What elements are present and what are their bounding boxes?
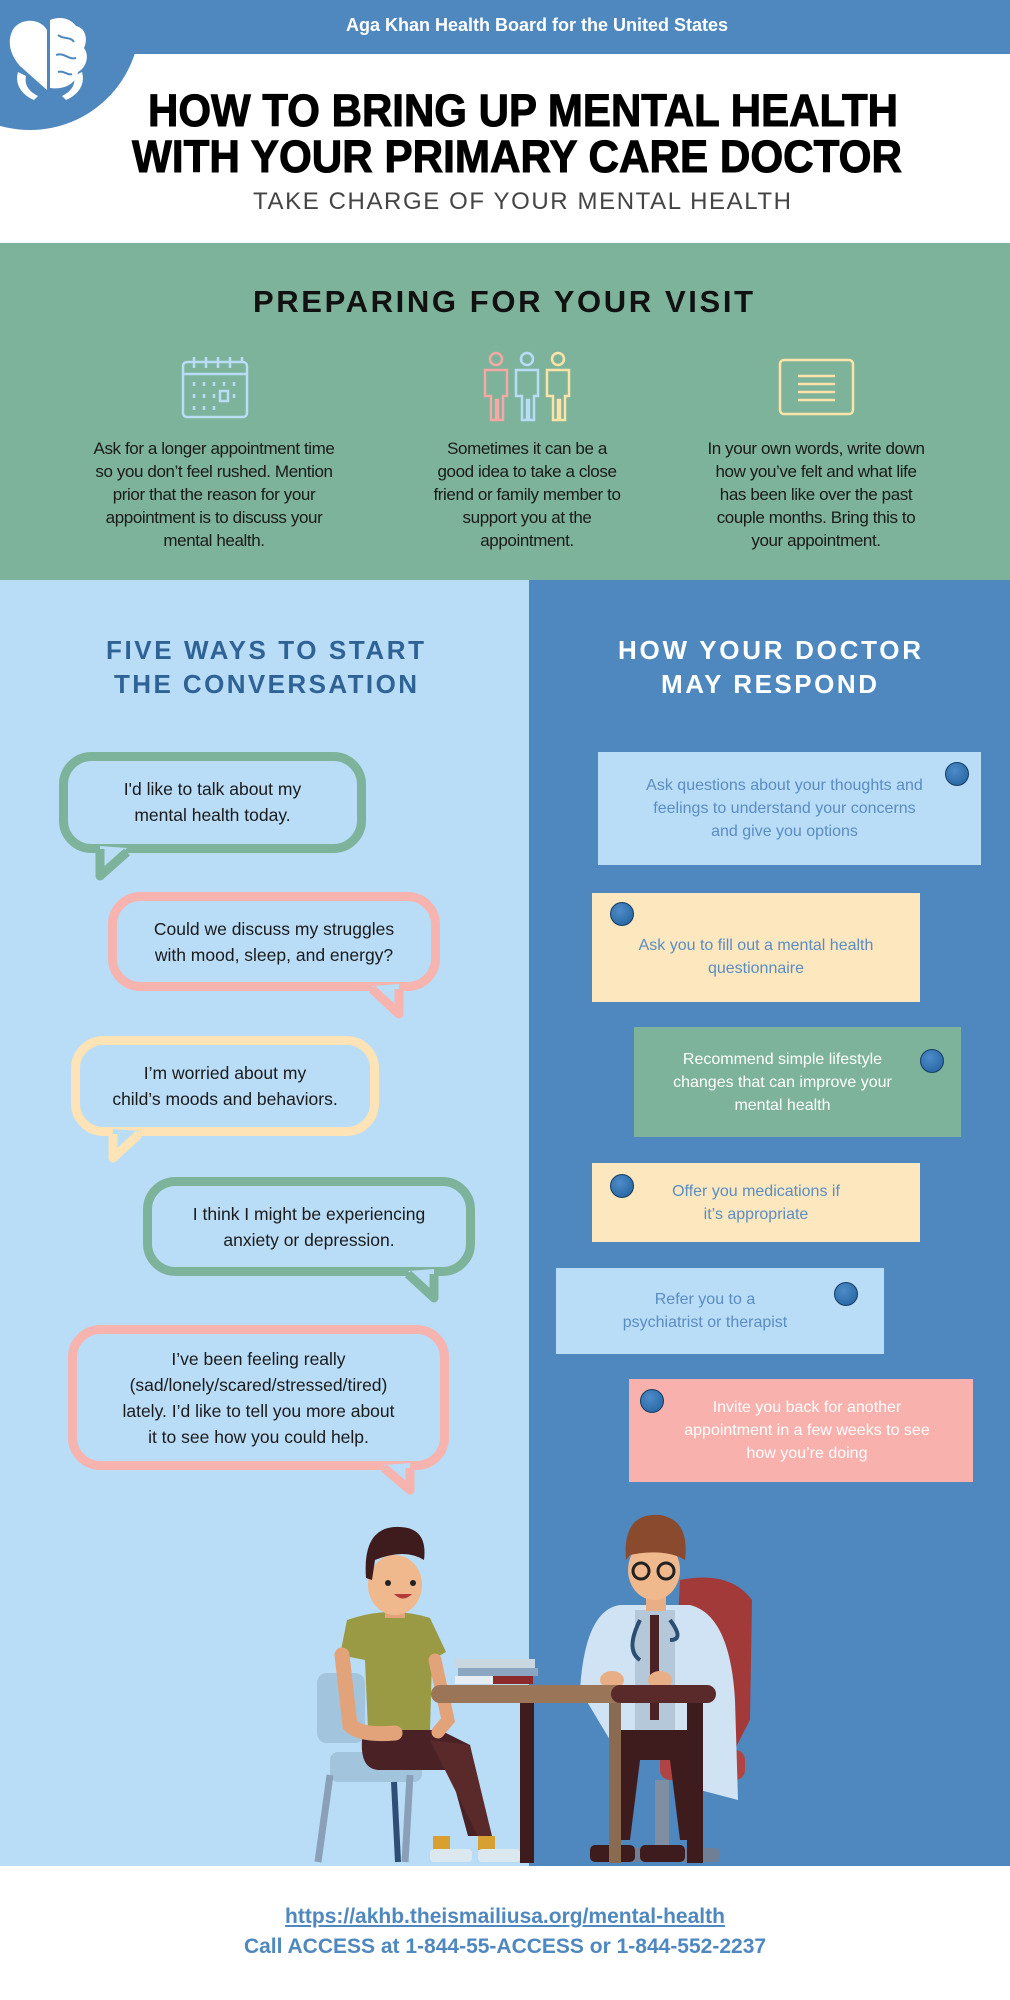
patient bbox=[340, 1527, 520, 1862]
logo badge bbox=[0, 18, 135, 130]
bubble 5 bbox=[72, 1330, 444, 1490]
response box 6: how you’re doing bbox=[746, 1445, 867, 1462]
bubble text 5 bbox=[122, 1348, 395, 1446]
text: tip 2 bbox=[433, 439, 621, 550]
text: tip 1: prior that the reason for your bbox=[113, 485, 315, 504]
text: tip 3: your appointment. bbox=[751, 531, 881, 550]
response box 2: Ask you to fill out a mental health bbox=[639, 936, 873, 954]
text: tip 3: how you’ve felt and what life bbox=[715, 462, 917, 481]
heading: doctor respond bbox=[618, 635, 921, 699]
icon: calendar bbox=[182, 357, 248, 418]
response box 1 bbox=[598, 752, 981, 865]
bubble text 2: Could we discuss my struggles bbox=[154, 918, 394, 938]
bubble text 5: (sad/lonely/scared/stressed/tired) bbox=[130, 1374, 387, 1394]
text: tip 3: In your own words, write down bbox=[707, 439, 925, 458]
response box 6: Invite you back for another bbox=[713, 1399, 901, 1416]
heading: doctor respond: HOW YOUR DOCTOR bbox=[618, 635, 921, 665]
text: tip 1: mental health. bbox=[163, 531, 265, 550]
response box 4: it’s appropriate bbox=[704, 1206, 808, 1222]
header bar bbox=[0, 0, 1010, 54]
response box 1: and give you options bbox=[711, 823, 858, 840]
bubble 2 bbox=[112, 896, 436, 1014]
header text: Aga Khan Health Board for the United States bbox=[346, 14, 728, 34]
bubble text 4: I think I might be experiencing bbox=[193, 1204, 425, 1224]
table bbox=[431, 1685, 716, 1863]
text: tip 1 bbox=[94, 439, 334, 550]
icon: dot 6 bbox=[640, 1389, 664, 1413]
bubble text 1 bbox=[124, 779, 302, 825]
bubble text 1: mental health today. bbox=[134, 805, 291, 825]
panel: left conversation background bbox=[0, 580, 529, 1866]
response box 2: questionnaire bbox=[708, 960, 804, 976]
bubble text 4: anxiety or depression. bbox=[223, 1230, 395, 1250]
icon: dot 2 bbox=[610, 902, 634, 926]
bubble text 5: it to see how you could help. bbox=[148, 1426, 369, 1446]
doctor bbox=[580, 1515, 738, 1862]
bubble text 4 bbox=[193, 1204, 425, 1250]
patient chair bbox=[317, 1673, 422, 1862]
panel: right responses background bbox=[529, 580, 1010, 1866]
bubble text 3: I’m worried about my bbox=[144, 1063, 306, 1083]
text: tip 3: couple months. Bring this to bbox=[717, 508, 915, 527]
bubble 1 bbox=[64, 756, 362, 876]
heading: five ways: FIVE WAYS TO START bbox=[106, 635, 424, 665]
heading: preparing: PREPARING FOR YOUR VISIT bbox=[253, 284, 753, 319]
footer bbox=[0, 1866, 1010, 2000]
response box 4 bbox=[592, 1163, 920, 1242]
text: tip 2: Sometimes it can be a bbox=[447, 439, 607, 458]
bubble text 5: I’ve been feeling really bbox=[171, 1348, 346, 1368]
response box 3: mental health bbox=[734, 1096, 831, 1114]
response box 4: Offer you medications if bbox=[672, 1182, 840, 1200]
icon: document bbox=[778, 358, 854, 416]
bubble text 5: lately. I’d like to tell you more about bbox=[122, 1400, 395, 1420]
bubble text 2 bbox=[154, 918, 394, 964]
bubble 3 bbox=[76, 1040, 374, 1158]
response box 1: feelings to understand your concerns bbox=[653, 800, 916, 817]
heading: five ways: THE CONVERSATION bbox=[114, 669, 417, 699]
title: TAKE CHARGE OF YOUR MENTAL HEALTH bbox=[253, 188, 791, 215]
icon: dot 3 bbox=[920, 1049, 944, 1073]
doctor chair bbox=[620, 1578, 752, 1862]
text: tip 3 bbox=[707, 439, 925, 550]
heading: doctor respond: MAY RESPOND bbox=[661, 669, 877, 699]
text: tip 2: good idea to take a close bbox=[437, 462, 617, 481]
response box 6 bbox=[629, 1379, 973, 1482]
books bbox=[455, 1659, 538, 1684]
title bbox=[132, 85, 902, 215]
footer link: https://akhb.theismailiusa.org/mental-health bbox=[285, 1905, 725, 1928]
icon: dot 4 bbox=[610, 1174, 634, 1198]
heading: five ways bbox=[106, 635, 424, 699]
text: tip 2: appointment. bbox=[480, 531, 574, 550]
footer phone: Call ACCESS at 1-844-55-ACCESS or 1-844-552-2237 bbox=[244, 1935, 766, 1958]
response box 5: psychiatrist or therapist bbox=[623, 1314, 787, 1331]
text: tip 1: appointment is to discuss your bbox=[106, 508, 322, 527]
icon: three people bbox=[484, 352, 570, 422]
bubble text 1: I'd like to talk about my bbox=[124, 779, 301, 799]
bubble 4 bbox=[148, 1182, 470, 1298]
bubble text 2: with mood, sleep, and energy? bbox=[155, 944, 393, 964]
response box 5: Refer you to a bbox=[655, 1291, 755, 1308]
response box 6: appointment in a few weeks to see bbox=[684, 1422, 930, 1439]
bubble text 3: child’s moods and behaviors. bbox=[112, 1089, 338, 1109]
bubble text 3 bbox=[112, 1063, 338, 1109]
title: WITH YOUR PRIMARY CARE DOCTOR bbox=[132, 131, 902, 182]
text: tip 2: friend or family member to bbox=[433, 485, 621, 504]
panel: preparing for your visit bbox=[0, 243, 1010, 580]
icon: dot 5 bbox=[834, 1282, 858, 1306]
response box 1: Ask questions about your thoughts and bbox=[646, 777, 923, 794]
icon: dot 1 bbox=[945, 762, 969, 786]
response box 3: Recommend simple lifestyle bbox=[683, 1050, 882, 1068]
title: HOW TO BRING UP MENTAL HEALTH bbox=[148, 85, 898, 136]
text: tip 1: Ask for a longer appointment time bbox=[94, 439, 334, 458]
response box 5 bbox=[556, 1268, 884, 1354]
speech bubbles bbox=[59, 752, 475, 1494]
response box 2 bbox=[592, 893, 920, 1002]
response box 3 bbox=[634, 1027, 961, 1137]
text: tip 2: support you at the bbox=[463, 508, 591, 527]
text: tip 3: has been like over the past bbox=[720, 485, 912, 504]
response box 3: changes that can improve your bbox=[673, 1074, 892, 1090]
text: tip 1: so you don’t feel rushed. Mention bbox=[95, 462, 333, 481]
